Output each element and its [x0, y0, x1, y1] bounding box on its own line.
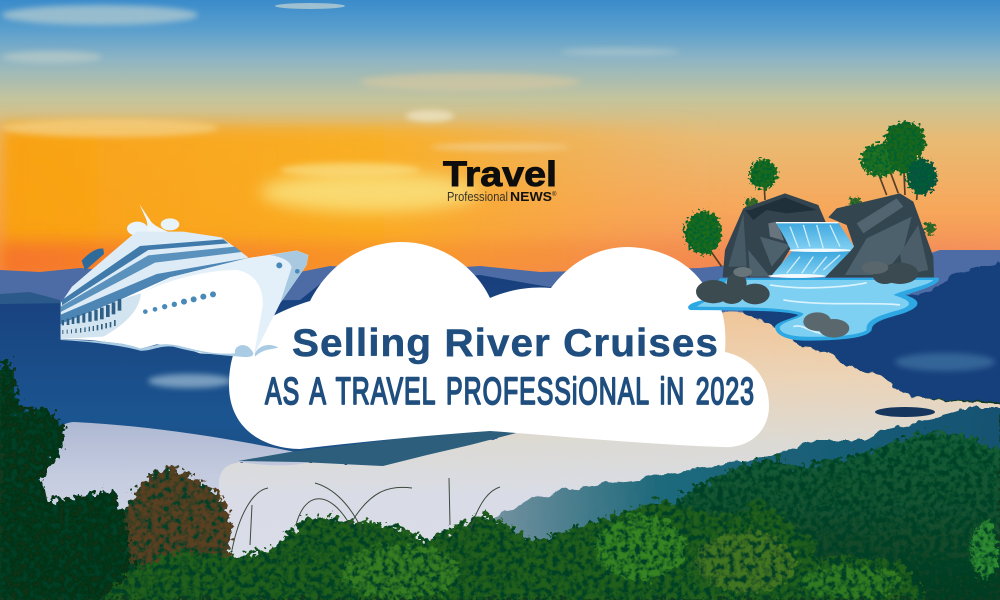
logo: Travel Professional News: [443, 155, 557, 204]
title line 1: Selling River Cruises: [292, 322, 719, 365]
right boulders: [873, 263, 918, 284]
icon: waterfall island: [685, 122, 939, 341]
lower deck dark windows: [62, 299, 121, 325]
dark river reflection band: [238, 426, 520, 466]
ship mast: [139, 204, 168, 233]
falls foam: [768, 222, 851, 278]
trees: [685, 122, 937, 255]
ship hull: [61, 251, 308, 358]
left rock cliff: [723, 193, 826, 277]
logo wordmark: Travel: [443, 155, 557, 194]
portholes: [143, 262, 300, 314]
logo news: NEWS: [510, 189, 552, 204]
red autumn tree: [125, 469, 231, 585]
edge underlay for foliage: [0, 370, 1000, 600]
center boulders: [803, 312, 849, 338]
small island: [875, 407, 935, 417]
tree trunks: [710, 157, 918, 267]
right rock cliff: [825, 193, 934, 277]
logo tagline: Professional: [447, 190, 508, 204]
foreground foliage: green shrubs: [100, 497, 998, 600]
hull shading: [61, 293, 141, 339]
bow shading: [140, 251, 308, 355]
logo registered mark: ®: [552, 191, 557, 198]
ship funnel: [82, 248, 104, 271]
pool: [688, 278, 939, 341]
white cloud title panel: [229, 242, 769, 449]
falls streaks: [787, 225, 840, 273]
bow wave: [61, 339, 278, 357]
title line 2: AS A TRAVEL PROFESSiONAL iN 2023: [265, 371, 755, 413]
upper falls: [776, 223, 854, 252]
fog over the lake: [33, 422, 310, 560]
dark blue forested hills and lake reflection: [0, 262, 1000, 480]
ship deck windows: [61, 239, 248, 324]
distant purple-blue hills: [0, 250, 1000, 340]
thin branches: [232, 478, 500, 550]
foreground foliage: dark left trees: [0, 360, 240, 600]
background: sunset sky: [0, 0, 1000, 300]
river: [120, 300, 1000, 560]
left boulders: [696, 273, 770, 304]
lower falls: [770, 252, 850, 277]
green hillside: [620, 430, 1000, 600]
ship domes: [127, 218, 179, 236]
lower hull ports: [62, 320, 116, 334]
blue-green far shore: [470, 408, 1000, 570]
icon: cruise ship: [61, 204, 308, 358]
ship superstructure: [61, 232, 248, 323]
